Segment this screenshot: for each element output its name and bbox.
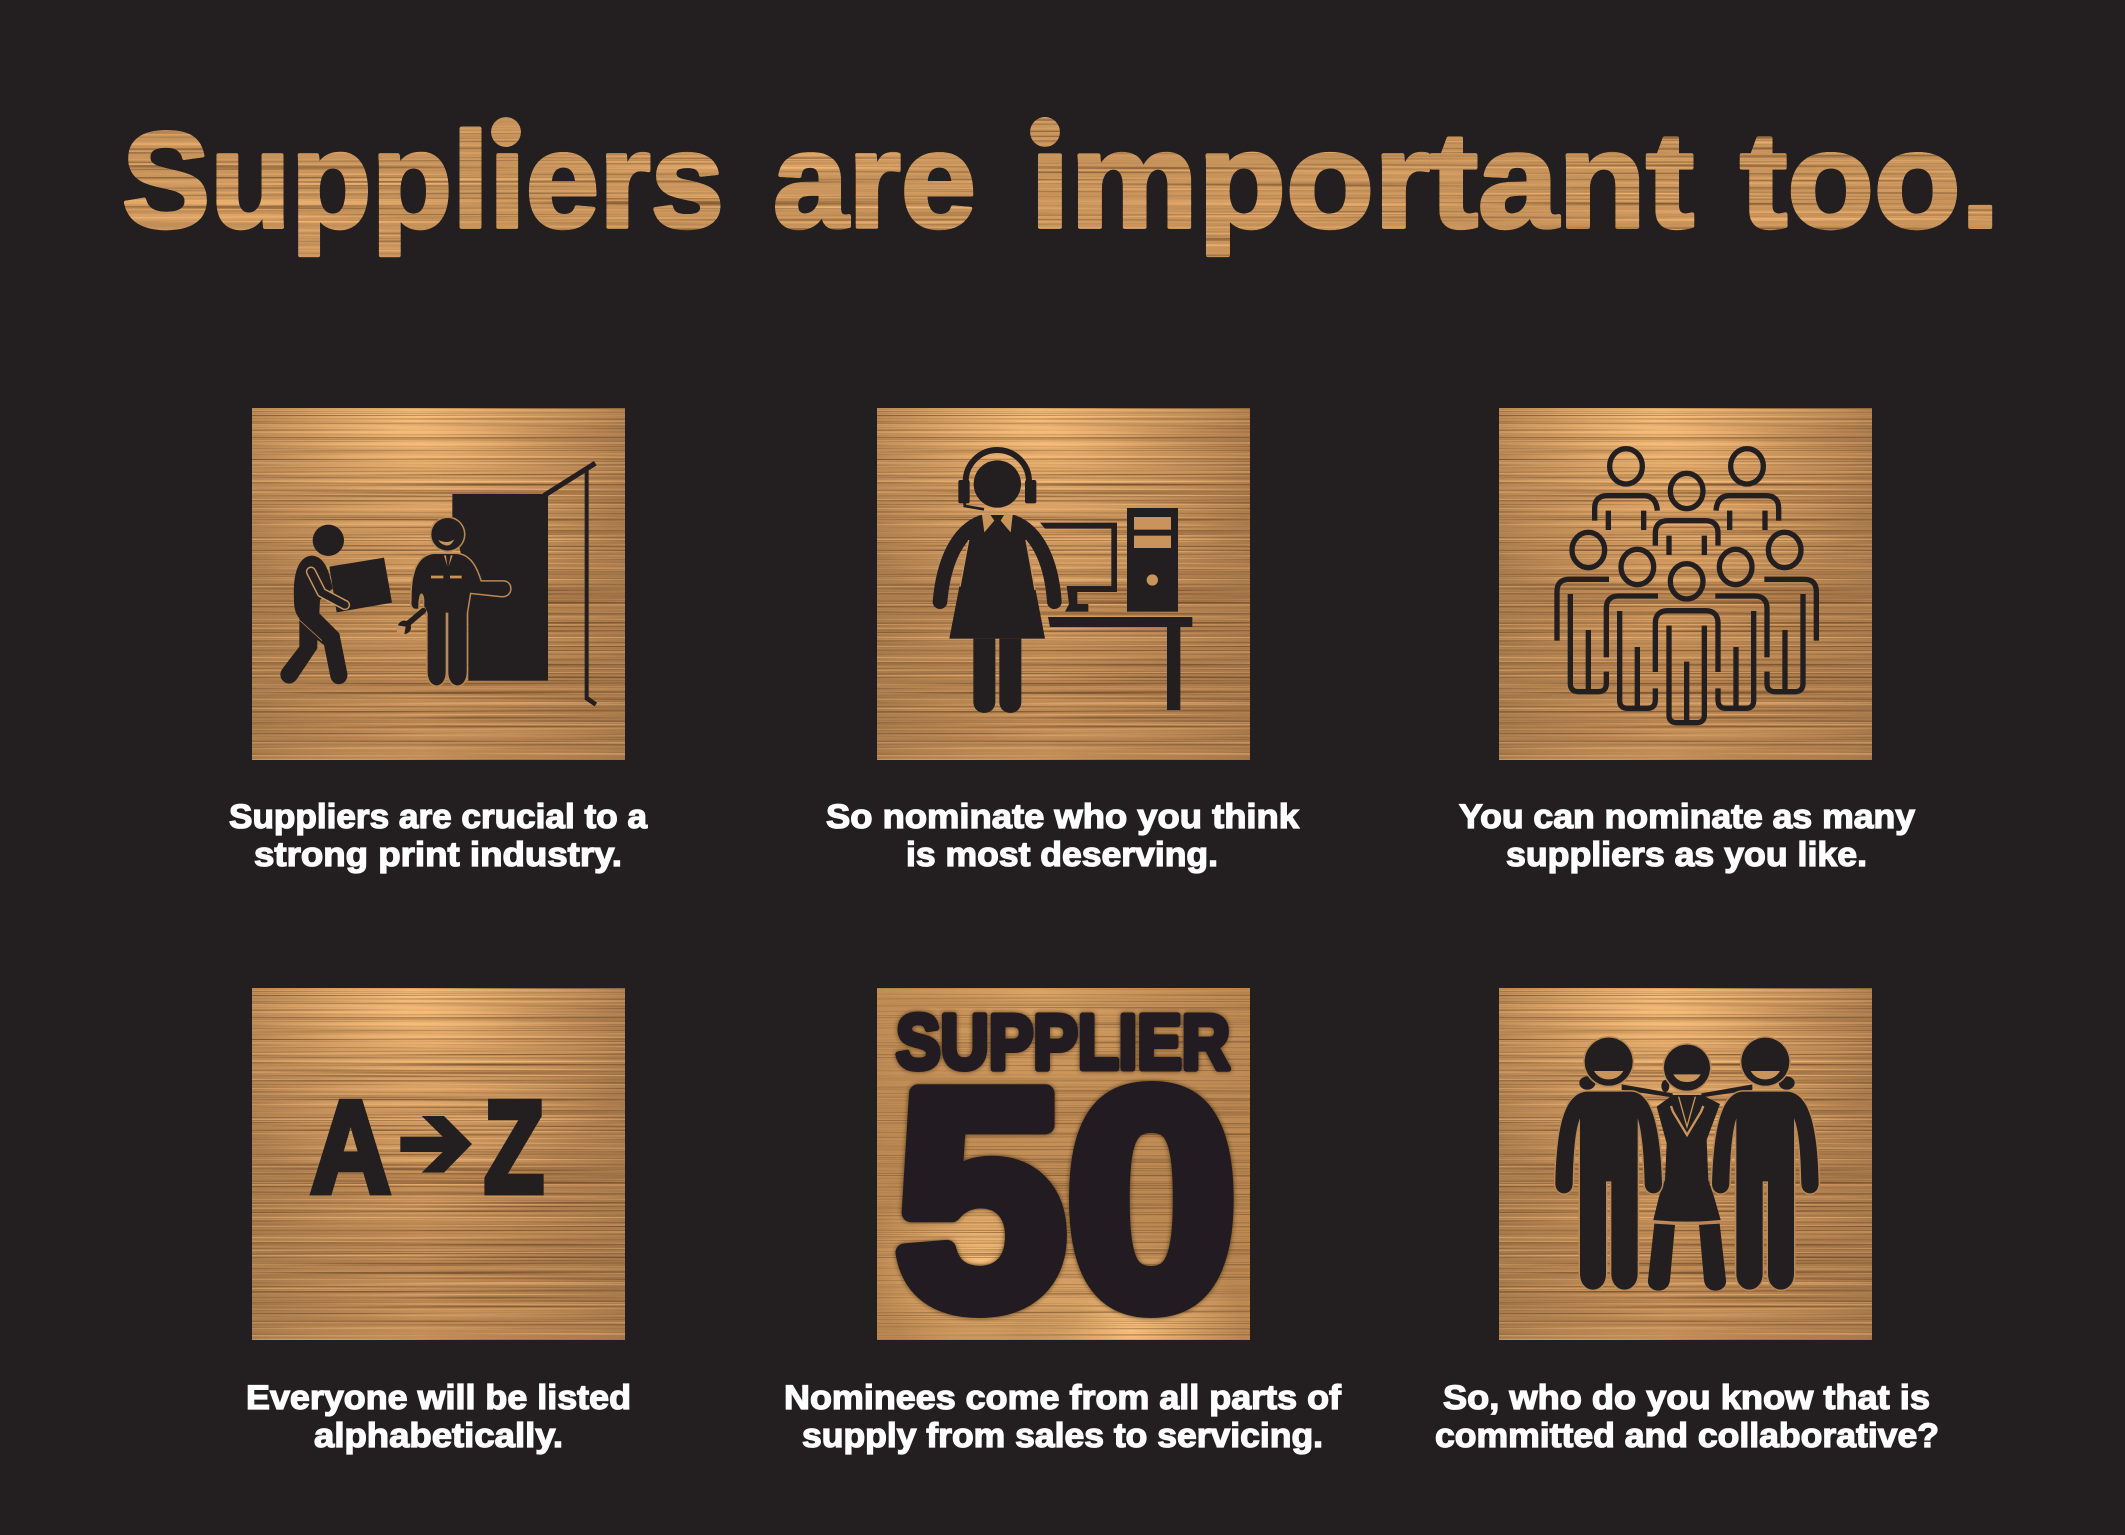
caption 4: alphabetically.: [314, 1417, 563, 1455]
caption 4: [246, 1379, 631, 1455]
caption 2: So nominate who you think: [826, 798, 1299, 836]
caption 3: You can nominate as many: [1459, 798, 1915, 836]
copper plate 6: [1499, 988, 1872, 1340]
copper plate 1: [252, 408, 625, 760]
title: [122, 104, 2000, 256]
caption 6: So, who do you know that is: [1443, 1379, 1930, 1417]
copper plate 5: [877, 988, 1251, 1340]
caption 6: [1435, 1379, 1939, 1455]
icon: group of people outline: [1557, 449, 1816, 723]
icon: delivery worker and mechanic at door: [280, 461, 597, 706]
title: are: [773, 104, 976, 256]
caption 3: suppliers as you like.: [1506, 836, 1867, 874]
caption 1: [229, 798, 648, 874]
title: Suppliers: [122, 104, 724, 256]
icon: supplier 50 logo: 50: [895, 1028, 1237, 1372]
caption 1: strong print industry.: [254, 836, 622, 874]
icon: A to Z: [311, 1074, 544, 1220]
caption 5: supply from sales to servicing.: [802, 1417, 1323, 1455]
panel: nominate deserving: [826, 408, 1299, 874]
icon: A to Z: A: [311, 1074, 391, 1220]
copper plate 4: [252, 988, 625, 1340]
caption 2: [826, 798, 1299, 874]
caption 6: committed and collaborative?: [1435, 1417, 1939, 1455]
copper plate 3: [1499, 408, 1872, 760]
panel: nominate many: [1459, 408, 1915, 874]
caption 1: Suppliers are crucial to a: [229, 798, 648, 836]
icon: call centre woman at computer desk: [940, 450, 1192, 713]
caption 5: [784, 1379, 1342, 1455]
title: too.: [1740, 104, 2000, 256]
panel: supplier 50: [784, 988, 1342, 1455]
panel: alphabetical: [246, 988, 631, 1455]
caption 4: Everyone will be listed: [246, 1379, 631, 1417]
icon: supplier 50 logo: SUPPLIER: [896, 1000, 1230, 1086]
caption 3: [1459, 798, 1915, 874]
icon: three colleagues arm in arm: [1555, 1038, 1819, 1291]
copper plate 2: [877, 408, 1251, 760]
panel: suppliers crucial: [229, 408, 648, 874]
icon: A to Z: Z: [484, 1074, 544, 1220]
caption 5: Nominees come from all parts of: [784, 1379, 1342, 1417]
caption 2: is most deserving.: [906, 836, 1218, 874]
title: important: [1030, 104, 1694, 256]
panel: committed and collaborative: [1435, 988, 1939, 1455]
